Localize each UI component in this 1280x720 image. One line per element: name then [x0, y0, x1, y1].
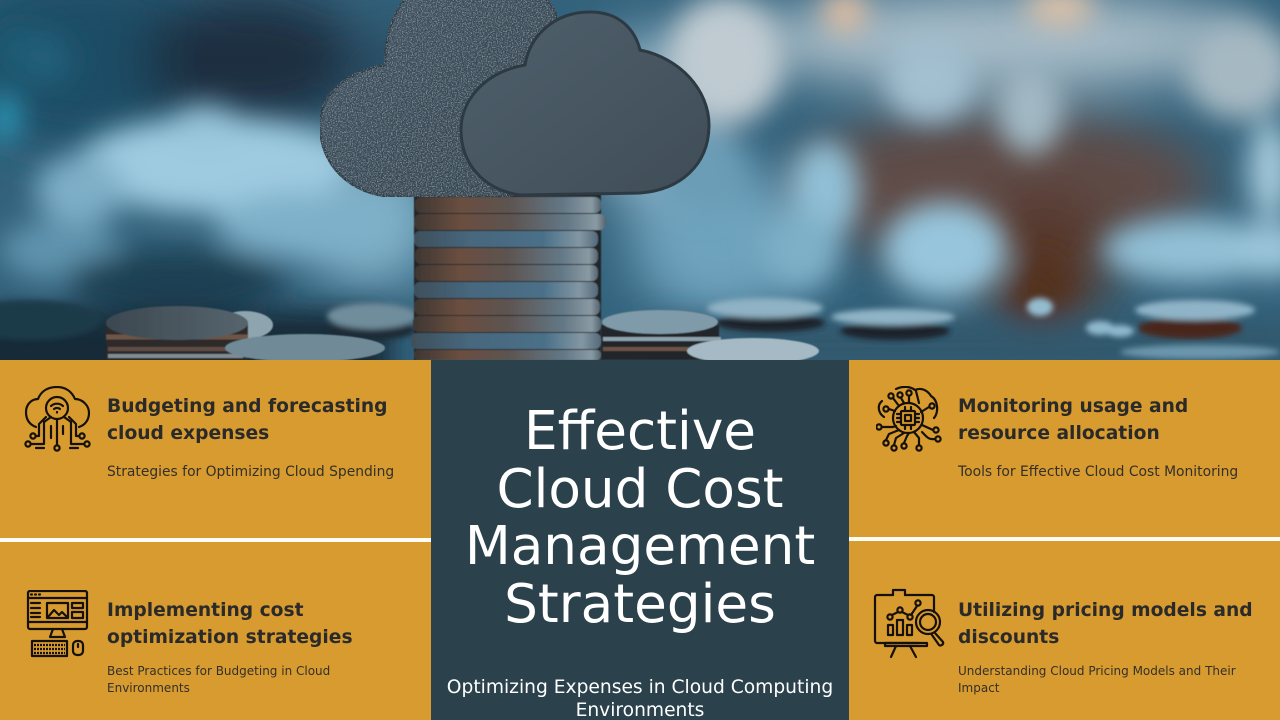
- subtext: Understanding Cloud Pricing Models and Their: [958, 664, 1236, 678]
- subtext: Environments: [107, 681, 190, 695]
- panel: budgeting and forecasting: [0, 360, 431, 540]
- subtitle: [447, 677, 833, 720]
- heading: cloud expenses: [107, 423, 269, 444]
- panel: implementing cost optimization: [0, 542, 431, 720]
- background coins: [0, 298, 1280, 359]
- blurred background: [0, 0, 1260, 330]
- heading: [107, 396, 388, 444]
- foreground coin piles: [106, 306, 819, 364]
- heading: [958, 600, 1253, 648]
- heading: resource allocation: [958, 423, 1160, 444]
- divider: right: [849, 537, 1280, 541]
- heading: optimization strategies: [107, 627, 353, 648]
- panel: pricing models: [849, 541, 1280, 720]
- icon: presentation board with magnifier: [874, 588, 944, 658]
- heading: Implementing cost: [107, 600, 304, 621]
- heading: Budgeting and forecasting: [107, 396, 388, 417]
- divider: left: [0, 538, 431, 542]
- heading: Utilizing pricing models and: [958, 600, 1253, 621]
- subtext: Best Practices for Budgeting in Cloud: [107, 664, 330, 678]
- heading: discounts: [958, 627, 1059, 648]
- heading: [107, 600, 353, 648]
- title: Effective: [524, 400, 756, 462]
- title: Management: [465, 515, 815, 577]
- title: Strategies: [504, 573, 776, 635]
- subtext: Impact: [958, 681, 1000, 695]
- icon: chip network: [876, 386, 942, 452]
- heading: [958, 396, 1188, 444]
- icon: cloud network: [24, 386, 91, 452]
- subtext: [107, 664, 330, 695]
- subtext: Strategies for Optimizing Cloud Spending: [107, 464, 394, 480]
- heading: Monitoring usage and: [958, 396, 1188, 417]
- clouds: [320, 0, 709, 197]
- subtitle: Optimizing Expenses in Cloud Computing: [447, 677, 833, 698]
- title: [465, 400, 815, 635]
- icon: computer with keyboard: [26, 590, 88, 658]
- title: Cloud Cost: [496, 458, 784, 520]
- subtext: [958, 664, 1236, 695]
- coin stack: [411, 194, 606, 360]
- panel: monitoring usage: [849, 360, 1280, 538]
- panel: title: [431, 360, 849, 720]
- subtext: Tools for Effective Cloud Cost Monitoring: [958, 464, 1238, 480]
- hero photo: cloud on coin stack: [0, 0, 1280, 360]
